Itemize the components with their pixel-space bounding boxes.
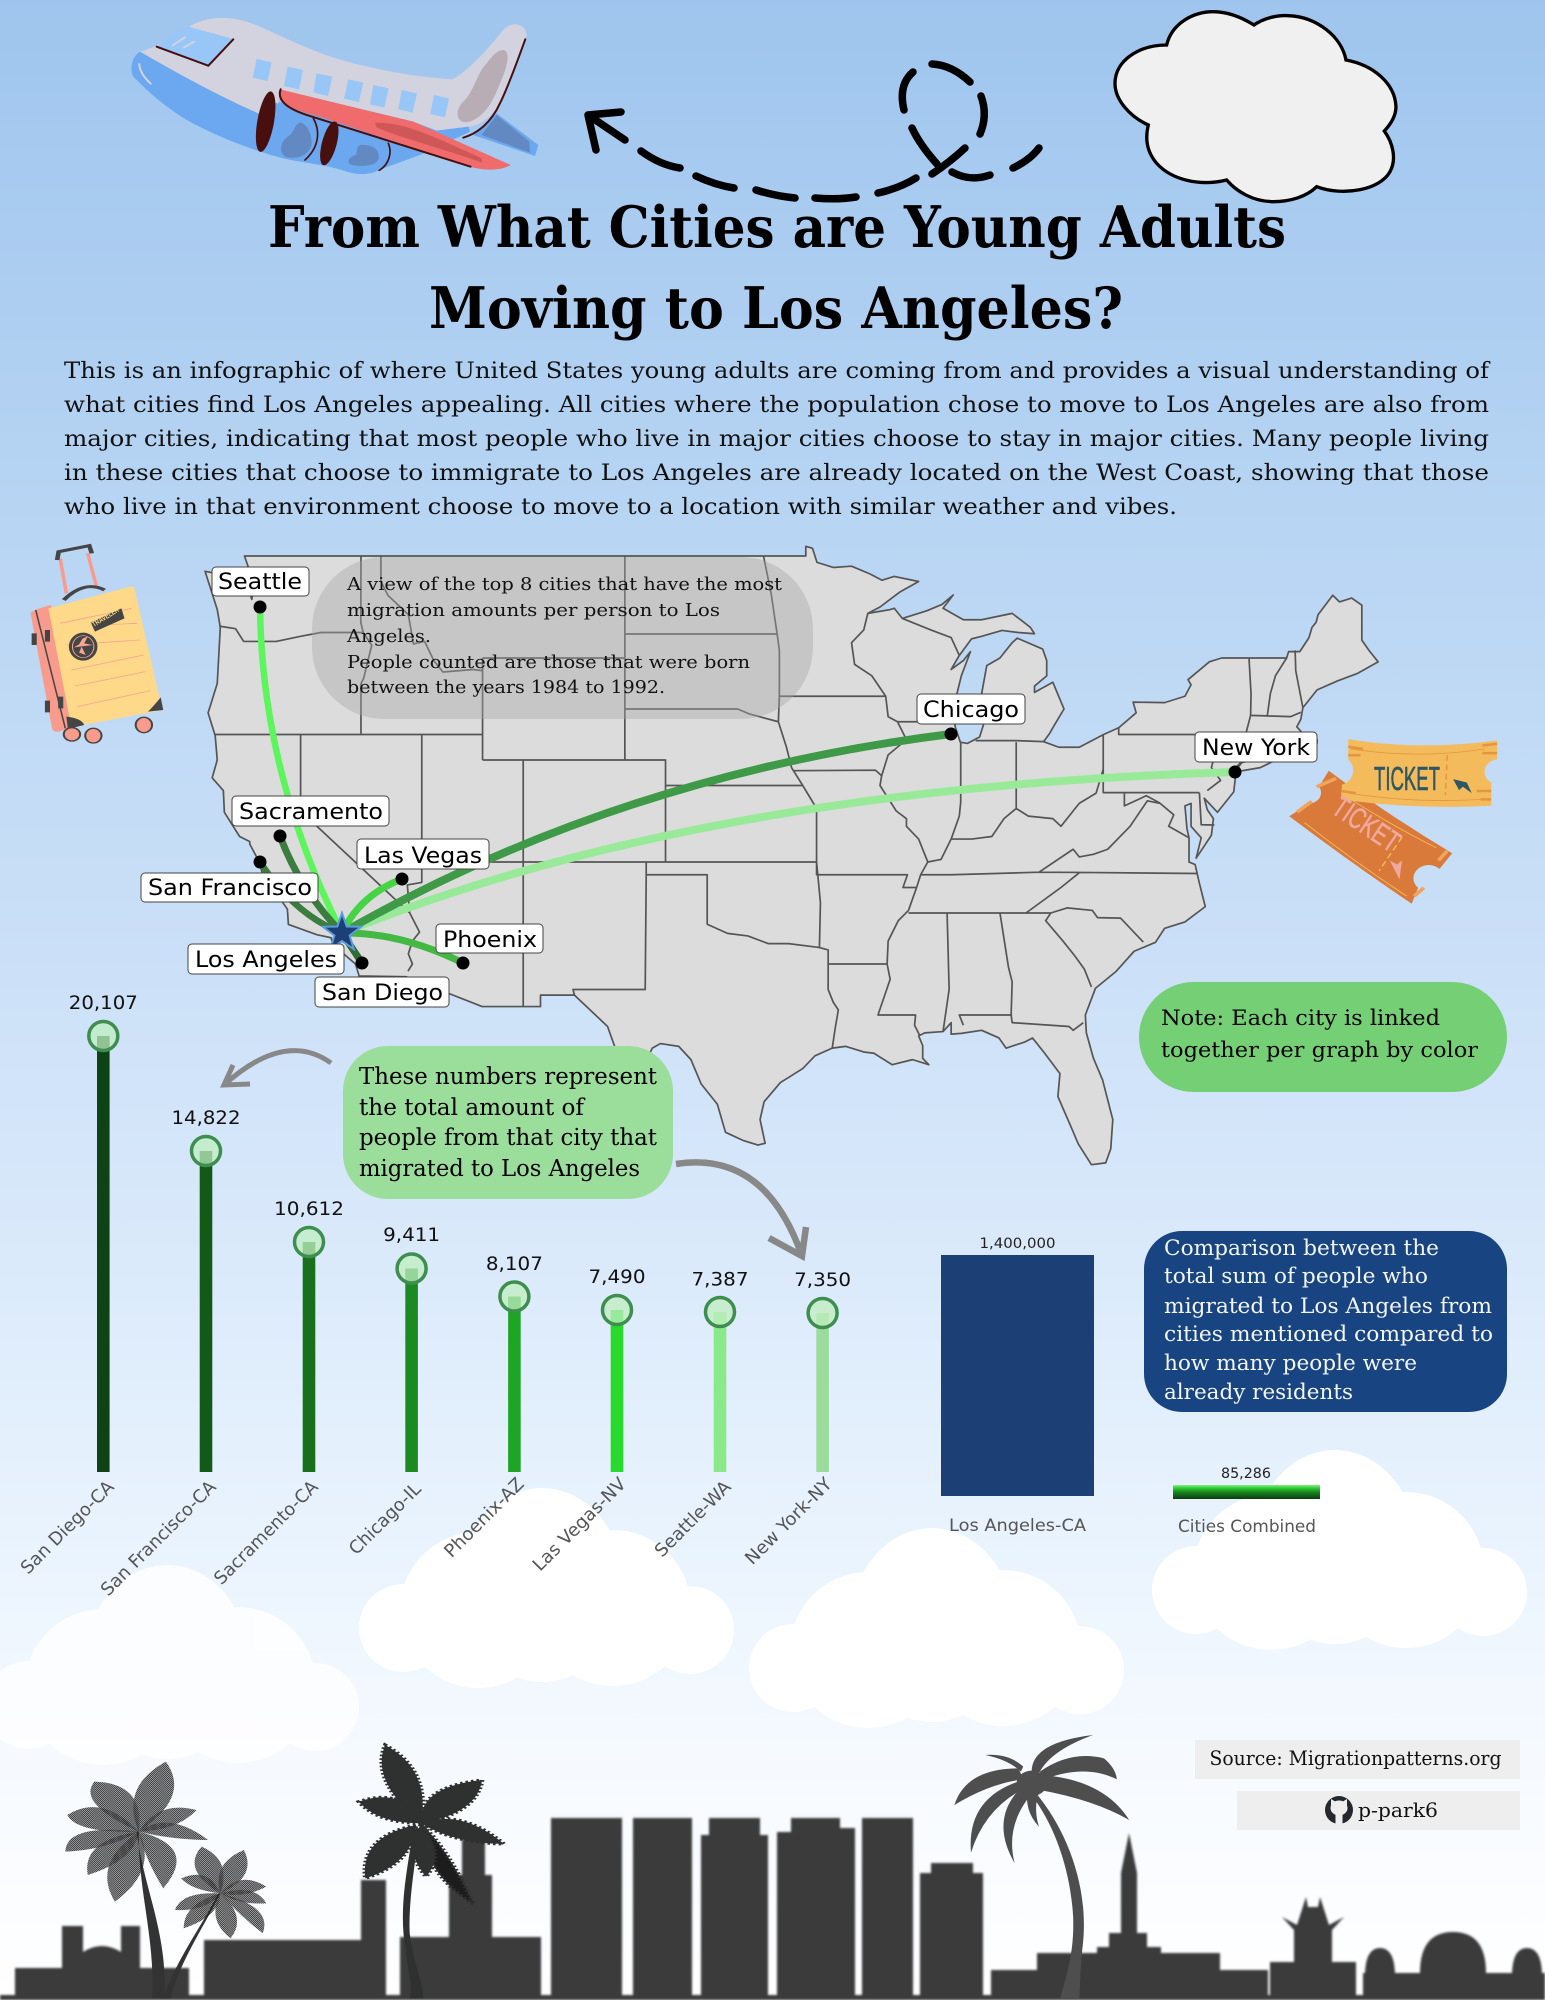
callout: colour linking note: together per graph by color: [1161, 1038, 1479, 1062]
map: city labels: Phoenix: [443, 928, 537, 953]
bar: Seattle: Seattle-WA: [651, 1476, 736, 1562]
bar: San Francisco: 14,822: [172, 1107, 240, 1129]
callout: comparison explanation: already residents: [1164, 1380, 1353, 1404]
bar: Chicago: [345, 1224, 440, 1559]
bar: San Diego: [17, 992, 138, 1579]
callout: meaning of the numbers: the total amount of: [359, 1095, 585, 1121]
arrow: callout to right bars: [676, 1162, 806, 1256]
callout: meaning of the numbers: people from that city that: [359, 1125, 658, 1151]
callout: comparison explanation: migrated to Los Angeles from: [1164, 1294, 1492, 1318]
title: [268, 194, 1286, 342]
map: city labels: Los Angeles: [195, 948, 337, 973]
title: From What Cities are Young Adults: [268, 194, 1286, 261]
callout: comparison explanation: cities mentioned compared to: [1164, 1322, 1493, 1346]
icon: tickets: [1289, 739, 1497, 904]
map: migration routes to Los Angeles: [260, 607, 1235, 963]
map: city dots: [254, 600, 1242, 970]
callout: comparison explanation: how many people were: [1164, 1351, 1417, 1375]
bar: Phoenix: Phoenix-AZ: [440, 1474, 529, 1562]
bar: New York: New York-NY: [741, 1473, 837, 1569]
bar: Phoenix: [440, 1253, 543, 1562]
cloud: lower centre left: [359, 1488, 734, 1688]
illustration: twin feathered palm trees: [65, 1762, 266, 1998]
bar: Las Vegas: 7,490: [588, 1266, 646, 1288]
chart: Los Angeles versus combined cities: [941, 1236, 1320, 1537]
chart: Los Angeles versus combined cities: 85,286: [1221, 1466, 1271, 1482]
panel: map description note: Angeles.: [346, 626, 431, 647]
illustration: dark palm tree: [359, 1745, 504, 1998]
callout: comparison explanation: Comparison between the: [1164, 1236, 1439, 1260]
bar: New York: 7,350: [794, 1269, 851, 1291]
map: city labels: Sacramento: [239, 800, 383, 825]
map: city labels: Chicago: [923, 698, 1019, 723]
arrow: callout to left bars: [224, 1051, 331, 1085]
callout: meaning of the numbers: [343, 1046, 673, 1199]
callout: comparison explanation: total sum of people who: [1164, 1264, 1428, 1288]
callout: meaning of the numbers: migrated to Los Angeles: [359, 1156, 640, 1182]
bar: San Francisco: [97, 1107, 241, 1600]
illustration: Los Angeles skyline: [0, 1818, 1545, 2000]
map: city labels: New York: [1202, 736, 1310, 761]
icon: suitcase: [31, 546, 163, 743]
source credit: [1195, 1740, 1520, 1779]
callout: meaning of the numbers: These numbers represent: [359, 1064, 658, 1090]
cloud: lower right: [1152, 1450, 1527, 1650]
author credit with GitHub icon: [1237, 1791, 1520, 1830]
intro paragraph: what cities find Los Angeles appealing. All cities where the population chose to move to Los Angeles are also from: [64, 392, 1489, 418]
chart: Los Angeles versus combined cities: Los Angeles-CA: [949, 1516, 1086, 1536]
author credit with GitHub icon: p-park6: [1358, 1798, 1438, 1822]
icon: cloud with outline: [1115, 12, 1396, 202]
intro paragraph: major cities, indicating that most people who live in major cities choose to stay in major cities. Many people living: [64, 426, 1489, 452]
intro paragraph: who live in that environment choose to move to a location with similar weather and vibes.: [64, 494, 1177, 520]
icon: airplane: [131, 18, 538, 174]
icon: tickets: TICKET: [1326, 790, 1406, 859]
cloud: lower centre right: [749, 1528, 1124, 1728]
chart: Los Angeles versus combined cities: 1,400,000: [980, 1236, 1056, 1252]
panel: map description note: People counted are those that were born: [347, 652, 750, 673]
intro paragraph: [64, 358, 1491, 520]
map: city labels: [141, 567, 1317, 1007]
bar: Chicago: 9,411: [383, 1224, 440, 1246]
bar: New York: [741, 1269, 851, 1569]
callout: comparison explanation: [1144, 1231, 1507, 1412]
icon: tickets: TICKET: [1374, 760, 1440, 797]
bar: San Diego: San Diego-CA: [17, 1476, 119, 1579]
panel: map description note: [312, 557, 813, 719]
bar: San Francisco: San Francisco-CA: [97, 1476, 221, 1600]
cloud: lower left: [0, 1565, 359, 1765]
bar: Chicago: Chicago-IL: [345, 1479, 426, 1559]
chart: lollipop chart of migrants by city: [17, 992, 851, 1600]
callout: colour linking note: [1139, 982, 1507, 1092]
illustration: smooth palm tree: [954, 1735, 1129, 1998]
intro paragraph: in these cities that choose to immigrate to Los Angeles are already located on the West Coast, showing that those: [64, 460, 1489, 486]
chart: Los Angeles versus combined cities: Cities Combined: [1178, 1517, 1316, 1537]
panel: map description note: migration amounts per person to Los: [347, 600, 720, 621]
bar: Sacramento: Sacramento-CA: [210, 1476, 323, 1589]
title: Moving to Los Angeles?: [429, 275, 1123, 342]
map: United States states: [205, 546, 1378, 1165]
arrow: dashed flight path: [588, 64, 1039, 199]
bar: Seattle: 7,387: [692, 1268, 748, 1290]
bar: Seattle: [651, 1268, 748, 1562]
map: city labels: San Francisco: [148, 876, 312, 901]
source credit: Source: Migrationpatterns.org: [1210, 1746, 1502, 1770]
icon: Los Angeles star: [323, 913, 361, 949]
bar: Phoenix: 8,107: [486, 1253, 543, 1275]
panel: map description note: between the years 1984 to 1992.: [347, 677, 665, 698]
bar: Sacramento: [210, 1198, 344, 1589]
intro paragraph: This is an infographic of where United States young adults are coming from and provides a visual understanding of: [64, 358, 1491, 384]
bar: Las Vegas: [529, 1266, 646, 1576]
callout: colour linking note: Note: Each city is linked: [1161, 1006, 1440, 1030]
panel: map description note: A view of the top 8 cities that have the most: [346, 574, 783, 595]
bar: San Diego: 20,107: [69, 992, 138, 1014]
bar: Las Vegas: Las Vegas-NV: [529, 1473, 631, 1576]
icon: suitcase: TRAVELER: [90, 605, 121, 629]
map: city labels: San Diego: [322, 981, 443, 1006]
bar: Sacramento: 10,612: [274, 1198, 344, 1220]
map: city labels: Las Vegas: [364, 844, 482, 869]
map: city labels: Seattle: [218, 570, 302, 595]
